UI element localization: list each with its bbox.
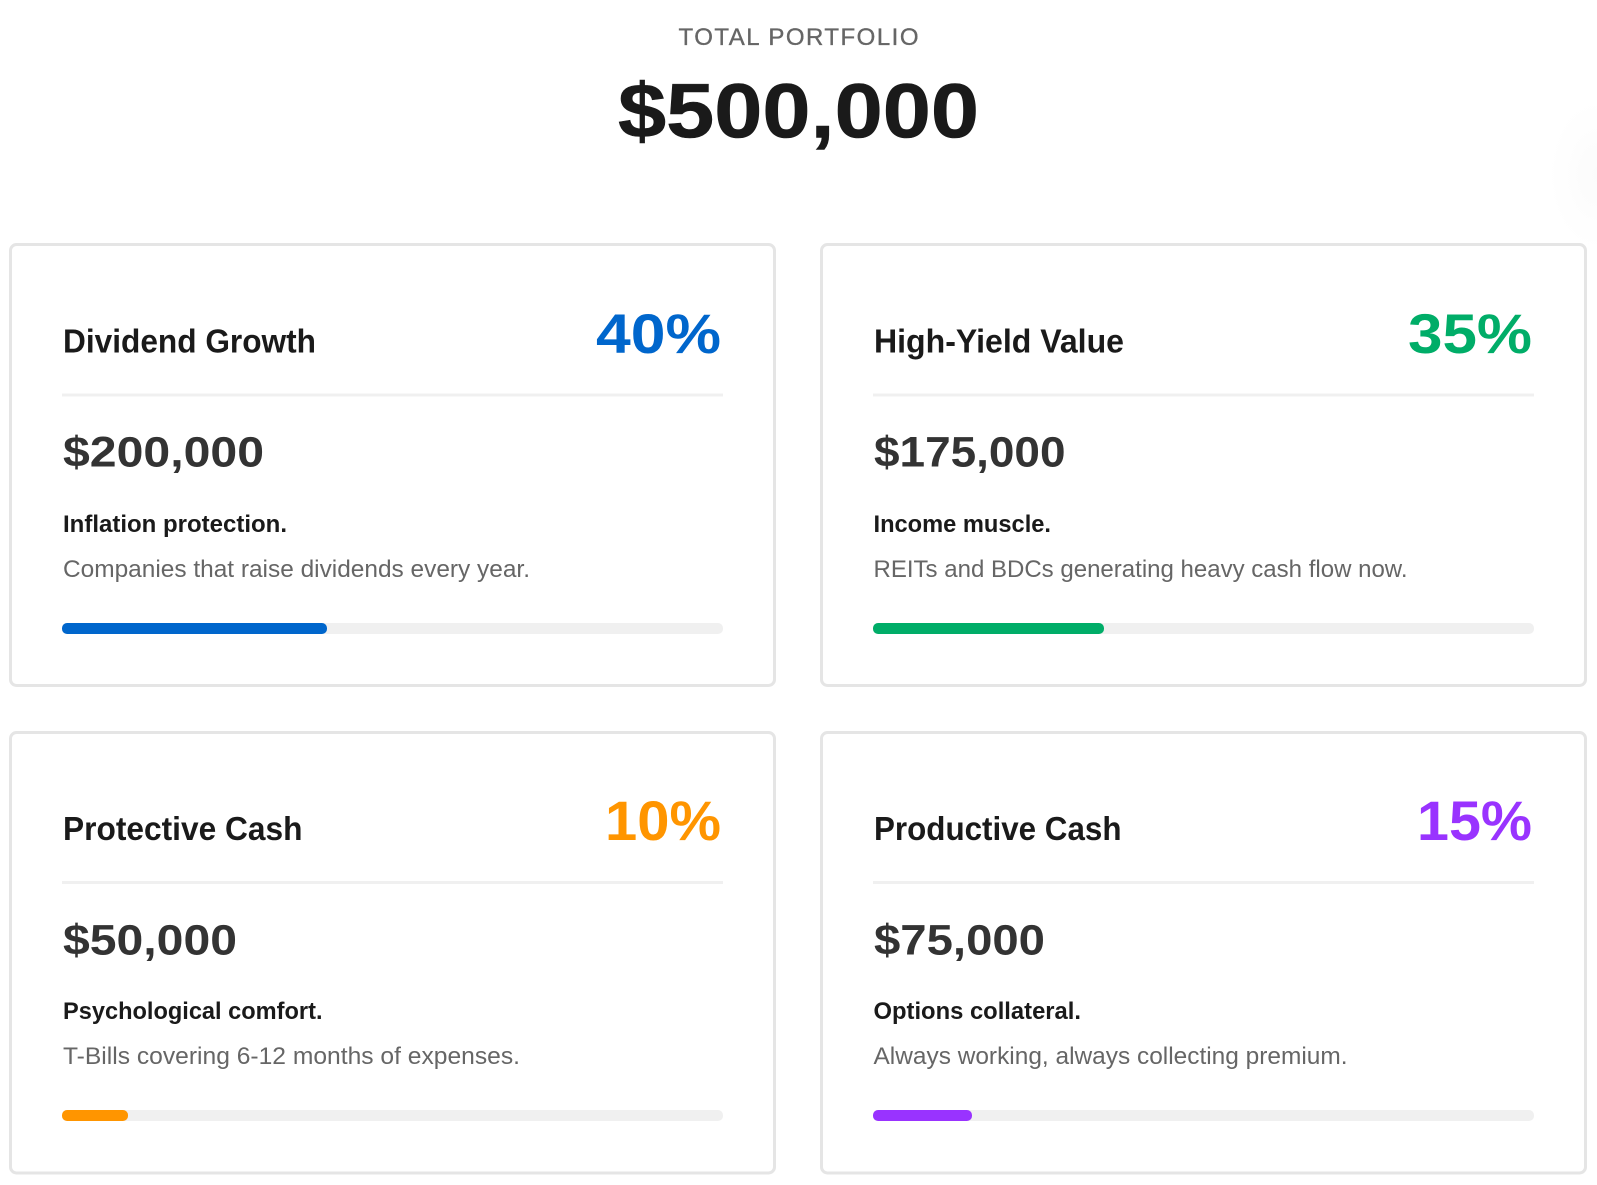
subheading: options collateral: Options collateral.: [874, 998, 1081, 1025]
progress bar: 35%: [873, 623, 1534, 634]
percentage: 35%: 35%: [1408, 302, 1532, 365]
panel: high-yield value: [822, 244, 1586, 686]
description: productive cash: Always working, always collecting premium.: [874, 1043, 1348, 1070]
total amount: $500,000: [618, 68, 979, 154]
panel: productive cash: [822, 732, 1586, 1173]
amount: $200,000: $200,000: [63, 428, 264, 476]
progress bar: 15%: [873, 1110, 1534, 1121]
description: dividend growth: Companies that raise dividends every year.: [63, 556, 530, 583]
panel: protective cash: [10, 732, 774, 1173]
percentage: 40%: 40%: [596, 302, 721, 365]
panel: dividend growth: [10, 244, 774, 686]
amount: $50,000: $50,000: [63, 916, 237, 964]
description: protective cash: T-Bills covering 6-12 months of expenses.: [63, 1043, 520, 1070]
amount: $175,000: $175,000: [874, 428, 1066, 476]
heading: protective cash: Protective Cash: [63, 810, 302, 847]
percentage: 10%: 10%: [605, 789, 721, 852]
heading: high-yield value: High-Yield Value: [874, 322, 1124, 360]
subheading: inflation protection: Inflation protection.: [63, 511, 287, 538]
percentage: 15%: 15%: [1417, 789, 1532, 852]
label: total portfolio: TOTAL PORTFOLIO: [678, 24, 918, 51]
description: high-yield value: REITs and BDCs generating heavy cash flow now.: [874, 556, 1408, 583]
subheading: psychological comfort: Psychological comfort.: [63, 998, 322, 1025]
subheading: income muscle: Income muscle.: [874, 511, 1051, 538]
amount: $75,000: $75,000: [874, 916, 1045, 964]
progress bar: 10%: [62, 1110, 723, 1121]
heading: productive cash: Productive Cash: [874, 810, 1122, 847]
heading: dividend growth: Dividend Growth: [63, 322, 316, 360]
header: total portfolio: [618, 24, 979, 154]
progress bar: 40%: [62, 623, 723, 634]
